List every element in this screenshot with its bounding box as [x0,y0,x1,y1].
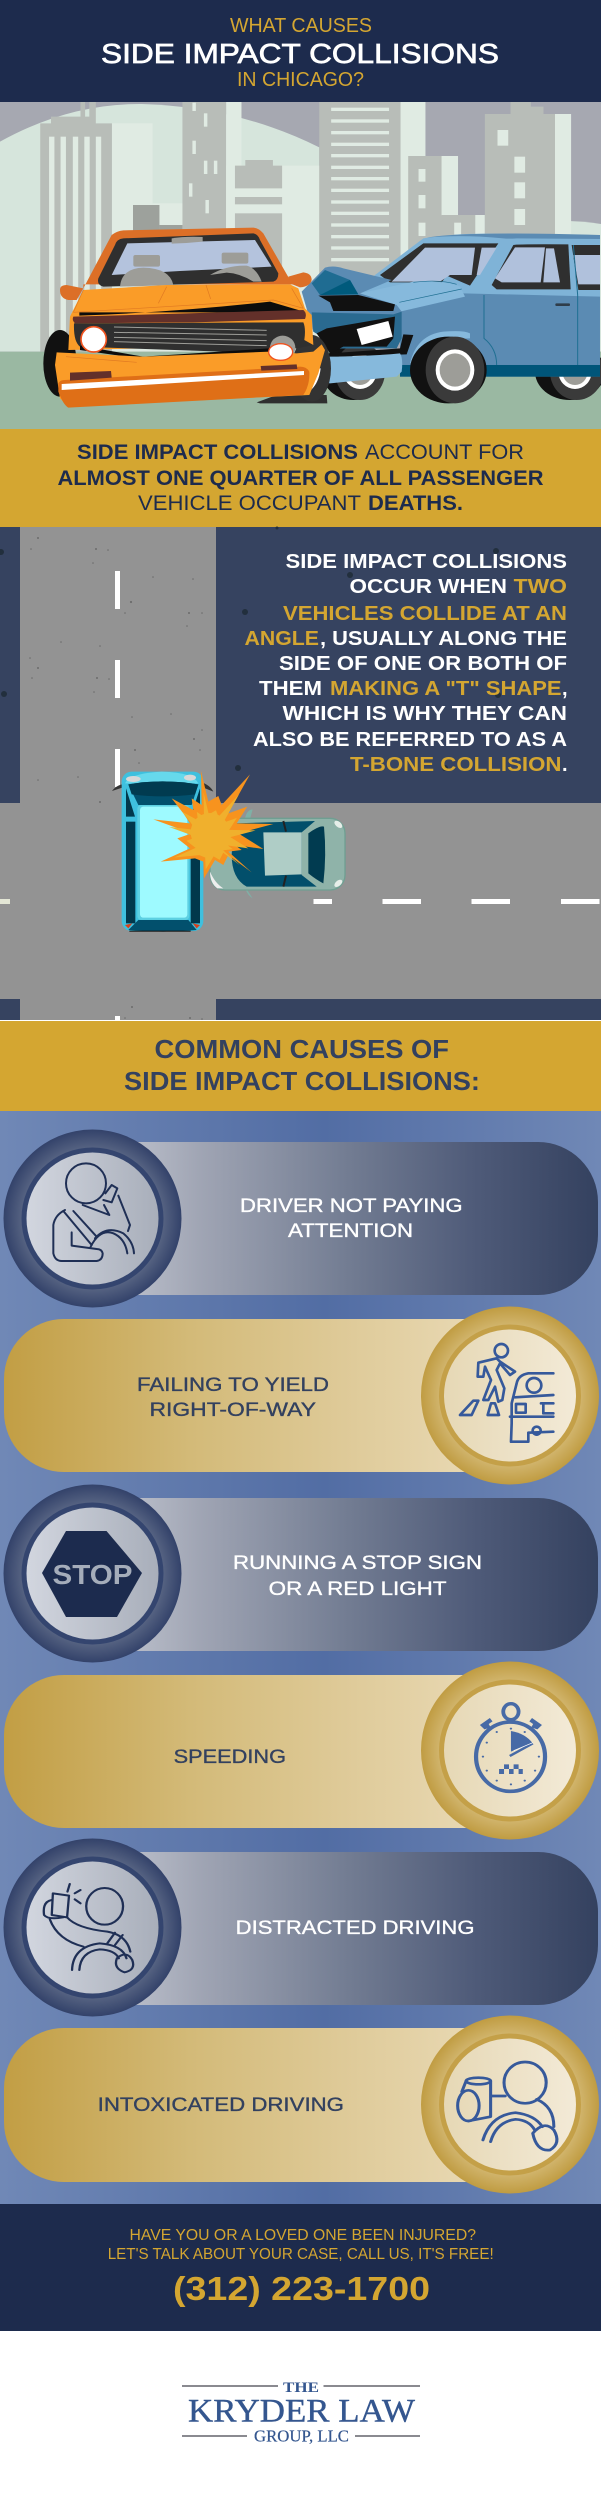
cause 5: distracted driving [4,1838,598,2016]
explanation paragraph: SIDE IMPACT COLLISIONS [286,551,567,573]
explanation paragraph: . [562,754,568,776]
explanation paragraph: , [562,678,568,700]
explanation paragraph: , USUALLY ALONG THE [320,628,567,650]
call to action footer [0,2204,601,2331]
explanation paragraph: VEHICLES COLLIDE AT AN [283,603,567,625]
stat banner [0,429,601,527]
cause 6: intoxicated driving: INTOXICATED DRIVING [98,2094,344,2116]
cause 5: distracted driving: DISTRACTED DRIVING [236,1917,474,1939]
logo: The Kryder Law Group: THE [283,2380,319,2396]
stat banner: DEATHS. [368,492,463,515]
explanation paragraph: SIDE OF ONE OR BOTH OF [279,653,567,675]
cause 1: driver not paying attention: ATTENTION [288,1220,413,1242]
cause 2: failing to yield: FAILING TO YIELD [137,1374,329,1396]
stat banner: ACCOUNT FOR [365,441,524,464]
explanation paragraph: ALSO BE REFERRED TO AS A [253,729,567,751]
icon: stop sign [42,1531,142,1617]
header band [0,0,601,102]
cause 3: running a stop sign [4,1484,598,1662]
icon: stopwatch [476,1704,545,1791]
logo: The Kryder Law Group: KRYDER LAW [188,2394,416,2430]
section heading: common causes [0,1021,601,1111]
cause 3: running a stop sign: OR A RED LIGHT [269,1578,447,1600]
header band: IN CHICAGO? [237,69,364,91]
cause 3: running a stop sign: RUNNING A STOP SIGN [233,1552,482,1574]
logo: The Kryder Law Group [0,2331,601,2493]
stat banner: VEHICLE OCCUPANT [138,492,361,515]
explanation paragraph: OCCUR WHEN [350,576,507,598]
illustration: top-down teal car [210,809,345,898]
section heading: common causes: COMMON CAUSES OF [154,1034,449,1064]
explanation paragraph: MAKING A "T" SHAPE [330,678,562,700]
causes panel background [0,1111,601,2204]
explanation paragraph: T-BONE COLLISION [350,754,562,776]
call to action footer: LET'S TALK ABOUT YOUR CASE, CALL US, IT'S FREE! [108,2246,494,2263]
stat banner: SIDE IMPACT COLLISIONS [77,441,358,464]
city skyline illustration [0,102,601,429]
explanation paragraph [244,551,568,776]
illustration: blue car [302,233,601,403]
illustration: orange car [43,228,331,408]
explanation paragraph: TWO [514,576,567,598]
stat banner: ALMOST ONE QUARTER OF ALL PASSENGER [58,467,544,490]
road intersection scene [0,526,601,1020]
call to action footer: (312) 223-1700 [173,2270,430,2307]
icon: impact explosion [153,771,273,878]
explanation paragraph: WHICH IS WHY THEY CAN [282,703,567,725]
cause 6: intoxicated driving [4,2016,599,2194]
header band: WHAT CAUSES [230,15,372,37]
header band: SIDE IMPACT COLLISIONS [101,38,499,69]
call to action footer: HAVE YOU OR A LOVED ONE BEEN INJURED? [130,2227,476,2244]
cause 1: driver not paying attention [4,1130,598,1308]
cause 2: failing to yield [4,1306,599,1484]
icon: stop sign: STOP [52,1559,132,1590]
icon: driver with drink [458,2062,557,2150]
cause 4: speeding: SPEEDING [174,1746,286,1768]
logo: The Kryder Law Group: GROUP, LLC [254,2426,349,2446]
icon: driver taking selfie [44,1884,133,1972]
icon: pedestrian and car [460,1344,553,1442]
explanation paragraph: THEM [259,678,322,700]
cause 2: failing to yield: RIGHT-OF-WAY [150,1399,316,1421]
explanation paragraph: ANGLE [244,628,319,650]
illustration: top-down blue car [112,772,213,932]
cause 1: driver not paying attention: DRIVER NOT PAYING [240,1195,463,1217]
cause 4: speeding [4,1662,599,1840]
section heading: common causes: SIDE IMPACT COLLISIONS: [124,1066,480,1096]
icon: driver on phone [53,1163,134,1261]
